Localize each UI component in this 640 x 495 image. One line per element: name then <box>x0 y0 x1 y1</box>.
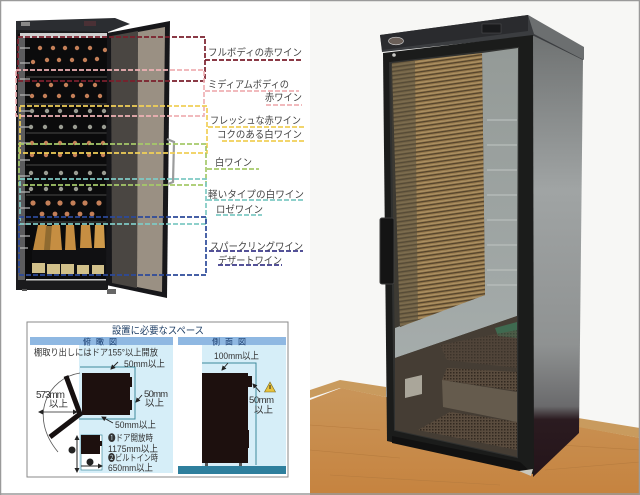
cellar side panel <box>533 35 583 477</box>
door note: 棚取り出しにはドア155°以上開放 <box>34 346 158 358</box>
side view header <box>178 337 286 345</box>
lower interior <box>395 316 517 457</box>
blinds darker left side <box>392 61 418 327</box>
shelves <box>26 77 107 222</box>
panel title: 設置に必要なスペース <box>112 324 204 337</box>
open door <box>50 376 80 437</box>
top view background <box>79 345 173 473</box>
control panel logo <box>21 22 30 26</box>
door handle <box>167 139 174 184</box>
text: 573mm: 573mm <box>36 390 65 401</box>
text: over: 以上 <box>254 405 274 416</box>
floor <box>178 466 286 474</box>
label: rose: ロゼワイン <box>216 204 263 216</box>
cabinet top bar <box>16 18 130 32</box>
clearance outline <box>79 367 135 419</box>
reflected shelf lines <box>487 120 517 285</box>
baseboard left <box>310 380 386 398</box>
text: right clearance: 50mm <box>144 389 168 400</box>
zone: white wine <box>19 144 259 185</box>
arrow: 100mm <box>222 363 228 370</box>
cabinet side <box>202 373 252 463</box>
zone outlines over the cellar <box>16 37 304 275</box>
cellar top <box>380 15 583 60</box>
arrow: top clearance <box>111 362 118 369</box>
cabinet body <box>16 28 108 290</box>
top view header text: 俯 瞰 図 <box>83 336 117 346</box>
cabinet foot <box>22 289 27 291</box>
logo badge <box>388 37 404 45</box>
interior step <box>442 380 517 422</box>
label: light white: 軽いタイプの白ワイン <box>208 188 304 201</box>
door glass dark part <box>111 31 138 288</box>
open door frame <box>106 21 170 298</box>
bottom floor grate <box>418 412 517 450</box>
arrow: bottom clearance <box>102 417 113 423</box>
baseboard right <box>578 418 640 438</box>
label: sparkling: スパークリングワイン <box>210 240 303 253</box>
cabinet feet <box>205 463 242 466</box>
text: door open note: ❶ドア開放時 <box>108 432 153 443</box>
interior sticker <box>405 375 422 398</box>
panel frame <box>27 322 288 477</box>
reflection of wall upper right <box>395 48 518 358</box>
door frame <box>383 35 534 474</box>
text: 50mm: 50mm <box>249 395 274 406</box>
floor <box>310 388 640 495</box>
label: medium body red line 2: 赤ワイン <box>265 92 302 104</box>
arrow: 50mm <box>253 384 260 392</box>
middle interior grate <box>442 368 517 391</box>
upper interior grate <box>440 330 517 368</box>
interior left wall <box>18 38 30 280</box>
open door swing arc <box>43 373 80 452</box>
champagne bottles <box>32 225 106 274</box>
zone: sparkling and dessert <box>19 217 206 275</box>
door glass tan part <box>137 27 165 292</box>
interior <box>18 34 108 280</box>
side view <box>178 336 286 474</box>
text: 650mm: 650mm以上 <box>108 463 153 474</box>
zone: fresh red and rich white <box>20 106 304 153</box>
mini plan diagram <box>68 435 102 472</box>
zone: medium body red <box>16 70 302 116</box>
top view header <box>30 337 173 345</box>
clearance line <box>202 363 256 465</box>
cellar top front bar <box>380 15 528 50</box>
text: 1175mm: 1175mm以上 <box>108 444 158 455</box>
icon: warning triangle <box>264 382 276 392</box>
temperature display <box>482 24 501 33</box>
zone: light white and rose <box>20 179 304 224</box>
door screw <box>392 53 396 57</box>
top view <box>30 336 173 474</box>
room photo with wine cellar <box>310 0 640 495</box>
text: built-in note: ❷ビルトイン時 <box>108 453 158 463</box>
interior bottom line <box>26 279 106 280</box>
door hinge <box>107 289 116 294</box>
label: medium body red line 1: ミディアムボディの <box>208 78 289 91</box>
green reflection <box>495 322 517 338</box>
text: top clearance: 50mm以上 <box>124 359 165 370</box>
reflection of window blinds <box>392 53 485 327</box>
door bottom rail <box>392 436 533 474</box>
zone: full body red <box>18 37 301 81</box>
side view background <box>202 345 286 466</box>
wine cellar open-door photo <box>16 18 174 298</box>
panel: required installation space <box>27 322 288 477</box>
text: over: 以上 <box>49 399 69 410</box>
label: fresh red: フレッシュな赤ワイン <box>210 115 301 127</box>
arrow: 573mm <box>39 411 77 413</box>
temperature display <box>84 21 96 26</box>
label: rich white: コクのある白ワイン <box>217 128 302 141</box>
cabinet plan <box>82 373 132 415</box>
door hinge <box>519 469 533 476</box>
side view header text: 側 面 図 <box>212 336 246 346</box>
bottle caps: white wine <box>29 109 106 191</box>
zone labels <box>208 46 304 267</box>
floor planks <box>310 425 640 485</box>
text: bottom clearance: 50mm以上 <box>115 420 156 431</box>
cellar top side <box>528 15 584 60</box>
text: 100mm: 100mm以上 <box>214 351 259 362</box>
label: dessert: デザートワイン <box>218 254 282 267</box>
arrow: right clearance <box>136 395 142 402</box>
wall <box>310 0 640 495</box>
interior top light <box>20 33 107 38</box>
zone leader lines: sparkling and dessert <box>209 251 303 265</box>
bottle caps: red wine <box>30 46 107 216</box>
door handle <box>380 218 394 284</box>
label: full body red: フルボディの赤ワイン <box>208 46 302 59</box>
label: white wine: 白ワイン <box>215 156 252 169</box>
text: right over: 以上 <box>145 398 165 409</box>
door inner edge <box>390 48 518 457</box>
